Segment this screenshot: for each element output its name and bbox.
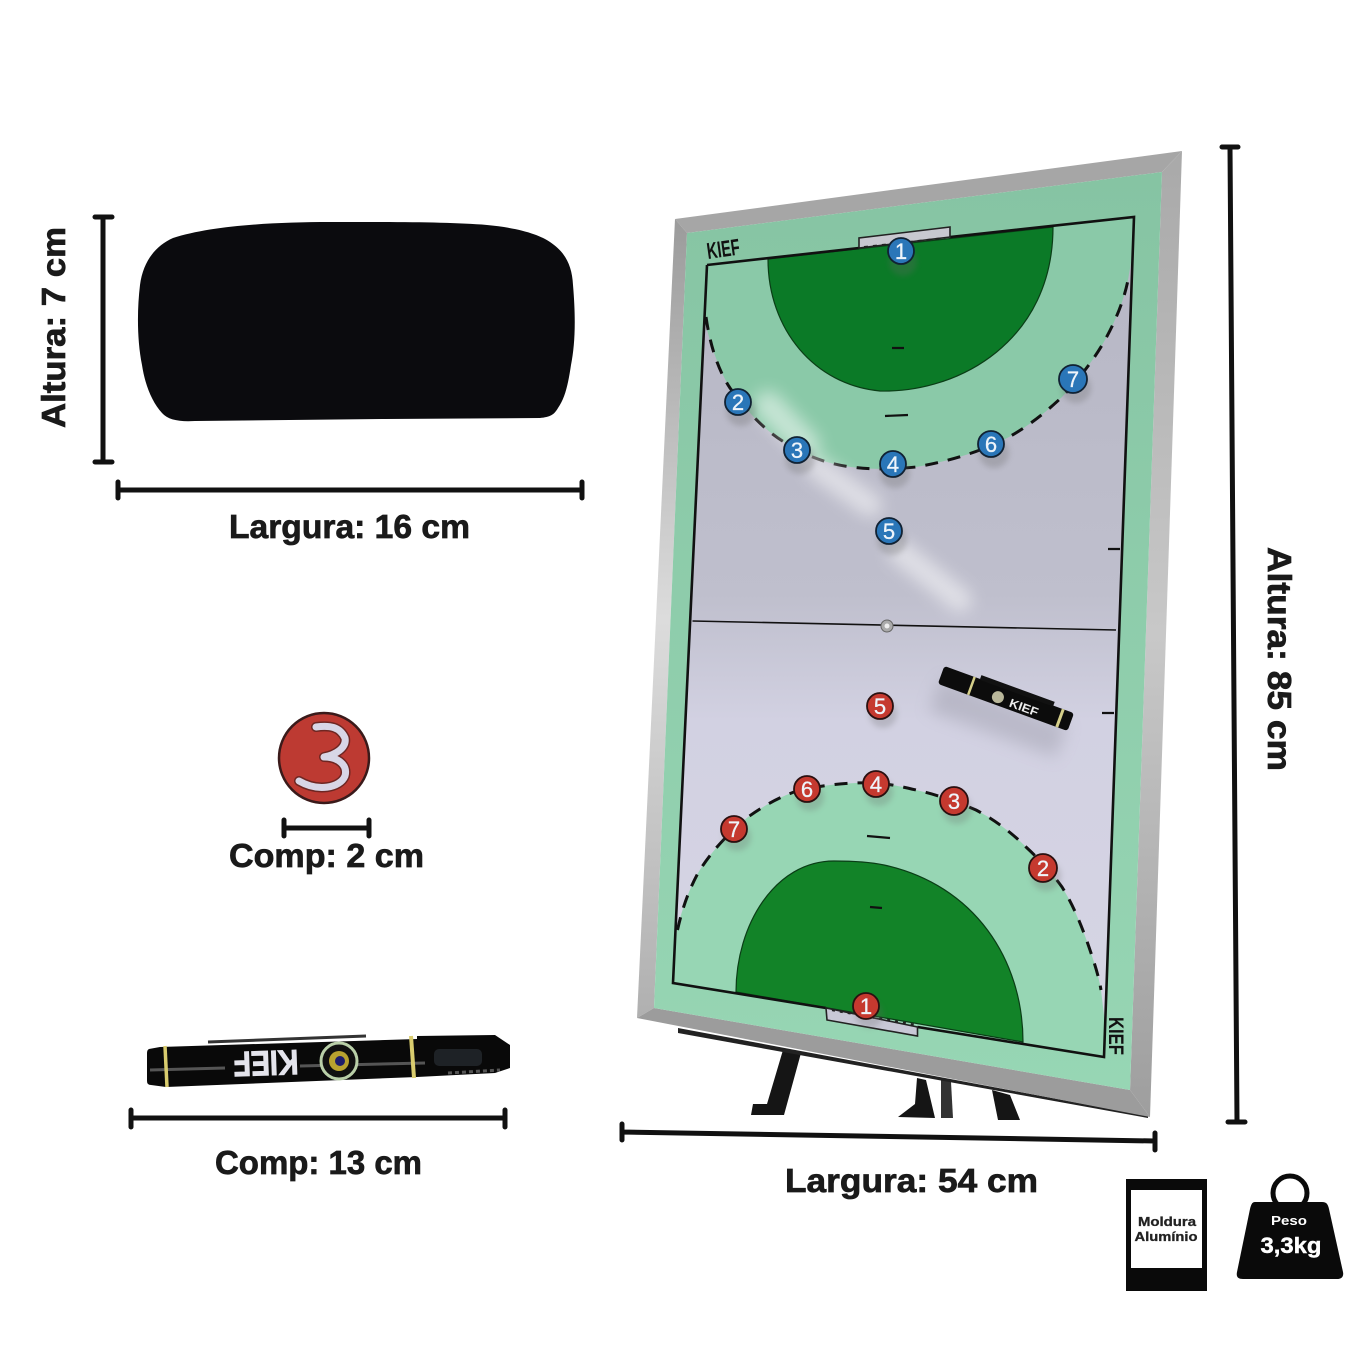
dimension: board height	[1222, 147, 1298, 1122]
bottom goal	[826, 1008, 918, 1036]
red numbers: 7	[728, 817, 740, 842]
dimension: board width	[622, 1124, 1155, 1199]
red numbers: 1	[860, 994, 872, 1019]
dimension: magnet length	[229, 820, 424, 874]
marker detail	[147, 1035, 510, 1087]
green board surface	[654, 172, 1162, 1090]
KIEF logo top: KIEF	[705, 234, 741, 264]
magnet detail	[279, 713, 369, 803]
whiteboard	[637, 151, 1182, 1118]
red numbers: 6	[801, 777, 813, 802]
dimension: magnet length: Comp: 2 cm	[229, 837, 424, 874]
easel stand	[751, 1050, 1020, 1120]
blue numbers: 4	[887, 452, 899, 477]
marker on board: KIEF	[1007, 696, 1040, 719]
dimension: pouch width: Largura: 16 cm	[229, 508, 470, 545]
dimension: board height: Altura: 85 cm	[1261, 547, 1298, 771]
bottom goal keeper area	[736, 861, 1023, 1042]
top goal area light	[700, 210, 1140, 469]
icon: weight: Peso	[1271, 1213, 1307, 1228]
marker detail: KIEF	[233, 1042, 299, 1083]
aluminium frame	[637, 151, 1182, 1118]
blue numbers: 1	[895, 239, 907, 264]
glare reflections	[768, 405, 960, 600]
dimension: pouch width	[118, 482, 582, 545]
marker on board	[928, 662, 1075, 758]
blue numbers: 5	[883, 519, 895, 544]
red numbers	[728, 694, 1049, 1019]
red shadows	[723, 700, 1061, 1028]
icon: aluminium frame	[1126, 1179, 1207, 1291]
dimension: board width: Largura: 54 cm	[785, 1162, 1038, 1199]
red numbers: 2	[1037, 856, 1049, 881]
red magnets	[721, 693, 1061, 1028]
blue numbers: 3	[791, 438, 803, 463]
court lines	[673, 217, 1134, 1057]
eraser pouch	[138, 222, 575, 421]
top goal	[859, 227, 950, 248]
court area	[673, 217, 1134, 1057]
blue numbers	[732, 239, 1079, 544]
red pieces	[721, 693, 1057, 1019]
top goal keeper area	[768, 227, 1053, 391]
icon: weight	[1237, 1176, 1343, 1279]
dimension: pouch height	[35, 217, 112, 462]
bottom goal area light	[672, 783, 1110, 1065]
red numbers: 4	[870, 772, 882, 797]
dimension: marker length	[131, 1110, 505, 1181]
blue numbers: 6	[985, 432, 997, 457]
dimension: pouch height: Altura: 7 cm	[35, 227, 72, 428]
icon: aluminium frame: Alumínio	[1134, 1230, 1198, 1244]
dimension: marker length: Comp: 13 cm	[215, 1144, 422, 1181]
center spot	[881, 620, 893, 632]
blue pieces	[725, 238, 1087, 544]
blue shadows	[726, 248, 1091, 555]
red numbers: 3	[948, 789, 960, 814]
blue magnets	[725, 238, 1091, 555]
blue numbers: 7	[1067, 367, 1079, 392]
icon: weight: 3,3kg	[1260, 1233, 1322, 1258]
icon: aluminium frame: Moldura	[1138, 1215, 1197, 1229]
blue numbers: 2	[732, 390, 744, 415]
KIEF logo bottom: KIEF	[1104, 1017, 1127, 1055]
red numbers: 5	[874, 694, 886, 719]
